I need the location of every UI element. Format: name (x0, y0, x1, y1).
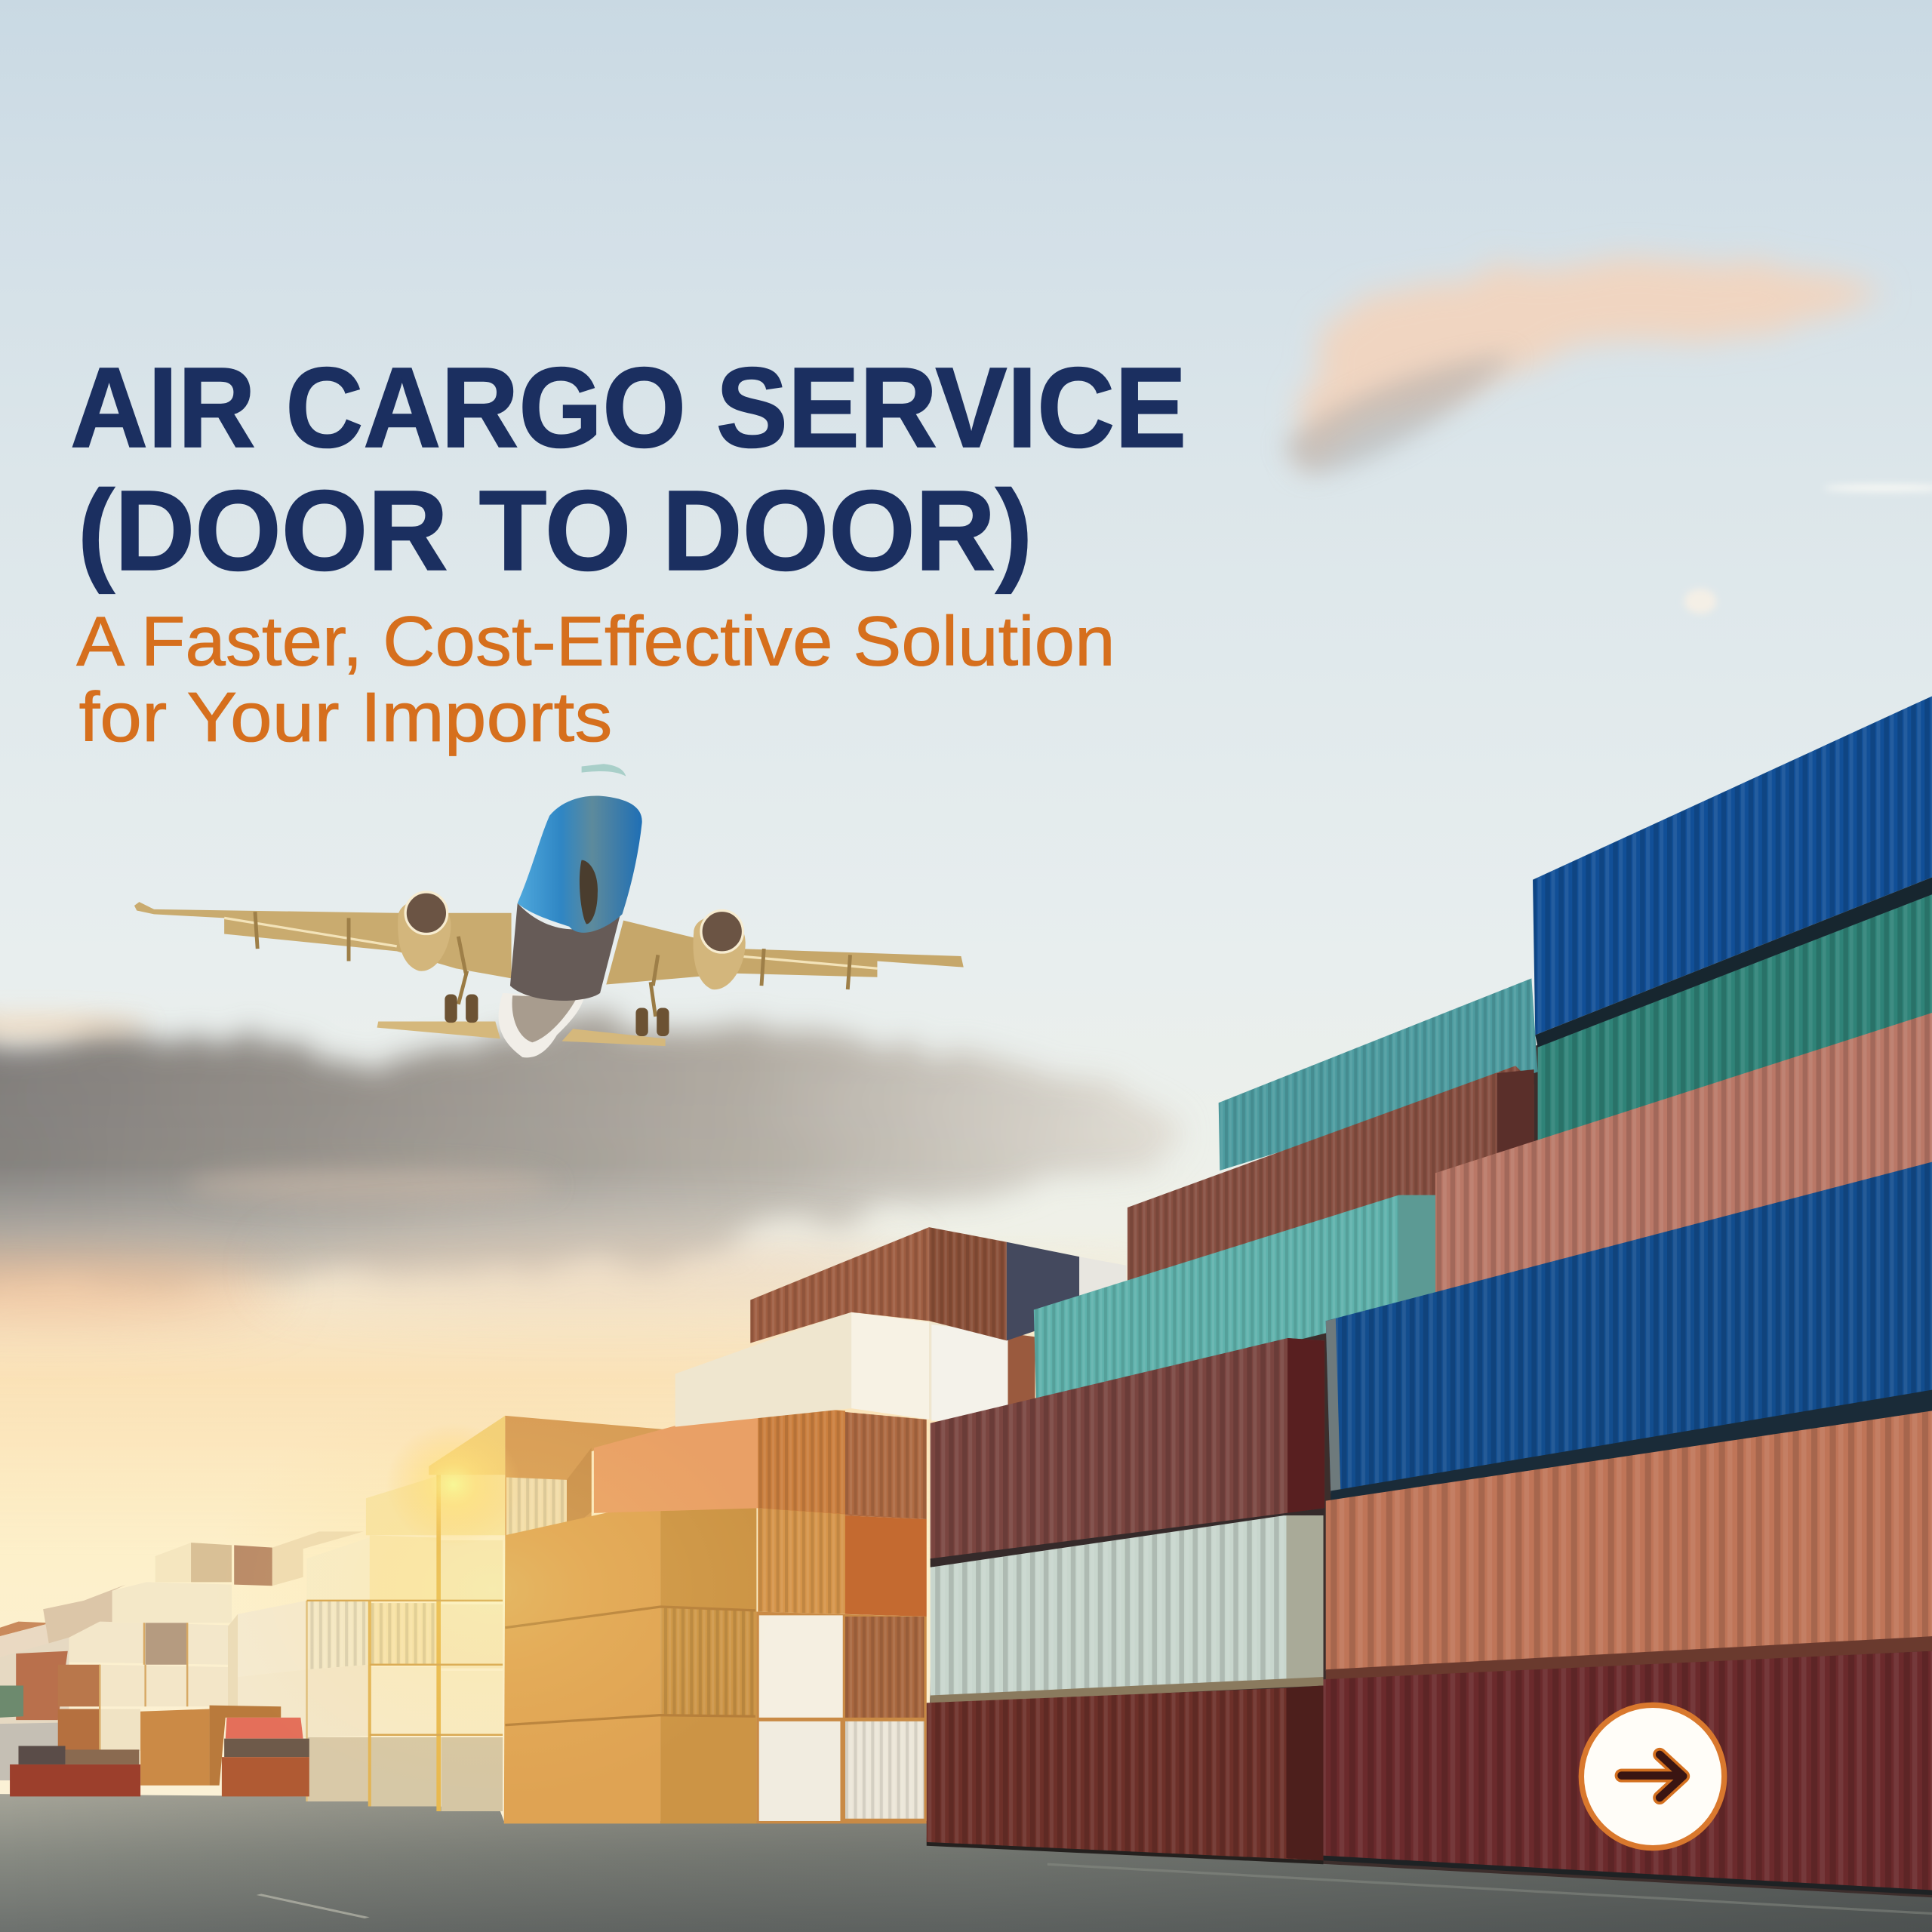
plane: left wing (134, 902, 512, 978)
icon: cargo airplane (134, 764, 964, 1057)
title (70, 344, 1186, 595)
containers: green teal right (1538, 894, 1932, 1146)
title line 2: (DOOR TO DOOR) (78, 467, 1032, 595)
plane: rear fuselage (499, 993, 584, 1057)
plane: tailplane (377, 1021, 666, 1046)
plane: detached glass fragment (582, 764, 626, 777)
containers: big blue (1326, 1162, 1932, 1503)
containers: teal top (1219, 978, 1538, 1171)
icon: arrow (1622, 1755, 1683, 1798)
truck and box trailer (10, 1706, 309, 1796)
subtitle line 1: A Faster, Cost-Effective Solution (76, 602, 1115, 681)
containers: big sunlit orange stack (504, 1404, 927, 1823)
button: next arrow (1581, 1705, 1724, 1848)
containers: middle brown top (931, 1338, 1324, 1567)
cloud: peach cloud upper right (1281, 259, 1932, 614)
ground: asphalt yard (0, 1794, 1932, 1932)
containers: salmon third tier (1435, 1013, 1932, 1306)
plane: blue nose (518, 795, 642, 933)
containers: dark red bottom right (1323, 1651, 1932, 1895)
cloud: grey band behind plane (0, 1017, 1183, 1315)
containers: upper back stack (675, 1227, 1126, 1429)
plane: right engine (693, 911, 746, 989)
containers: middle white-green (931, 1515, 1323, 1704)
containers: middle dark red (927, 1685, 1323, 1864)
containers: pale stacks centre left (238, 1416, 663, 1811)
containers: big salmon (1326, 1411, 1932, 1681)
sun glare (210, 1380, 777, 1799)
subtitle (76, 602, 1115, 756)
plane: main landing gear (445, 971, 669, 1036)
plane: belly (510, 903, 621, 1001)
plane: left engine (398, 892, 451, 971)
subtitle line 2: for Your Imports (78, 678, 612, 756)
containers: distant stacks far left (0, 1531, 364, 1780)
containers: top blue right (1533, 696, 1932, 1048)
containers: backing for gaps (927, 888, 1932, 1897)
containers: light teal (1034, 1195, 1435, 1404)
title line 1: AIR CARGO SERVICE (70, 344, 1186, 472)
plane: right wing (606, 921, 964, 989)
containers: brown second tier (1128, 1066, 1534, 1287)
